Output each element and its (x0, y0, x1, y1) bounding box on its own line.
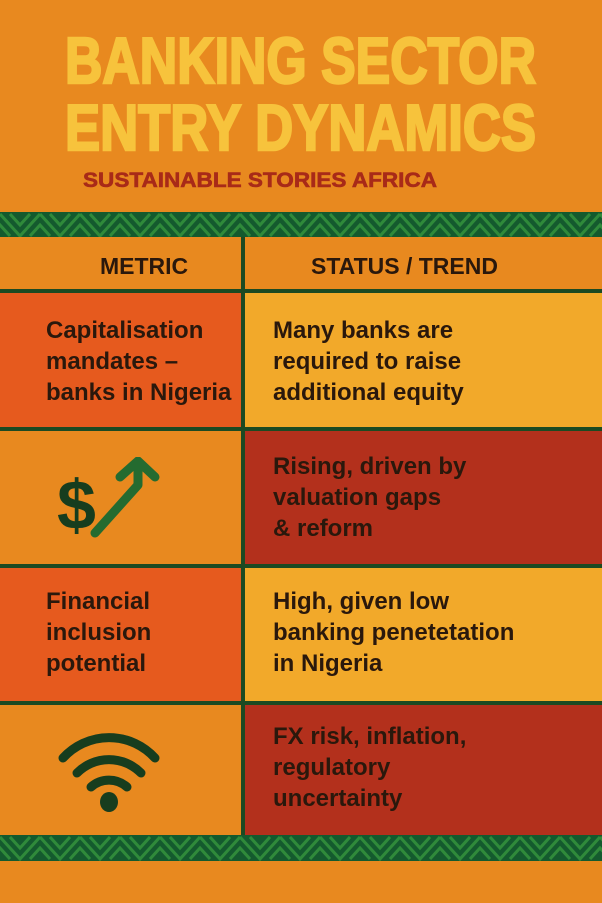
row1 metric text (46, 317, 232, 406)
row1 status text: required to raise (273, 348, 461, 375)
row4 status text (273, 723, 466, 812)
row2 status text: valuation gaps (273, 484, 441, 511)
row1 metric text: banks in Nigeria (46, 379, 231, 406)
row1 metric text: Capitalisation (46, 317, 203, 344)
header: status: STATUS / TREND (311, 253, 498, 279)
row4 status text: regulatory (273, 754, 390, 781)
row1 metric text: mandates – (46, 348, 178, 375)
pattern band top (0, 212, 602, 237)
title (65, 24, 537, 164)
row1 status text: additional equity (273, 379, 464, 406)
row4 status text: FX risk, inflation, (273, 723, 466, 750)
row2 status text: & reform (273, 515, 373, 542)
table (0, 237, 602, 836)
row 3 (0, 568, 241, 701)
row3 status text (273, 588, 514, 677)
icon: wifi signal (58, 733, 160, 812)
pattern band bottom (0, 835, 602, 861)
icon: dollar with arrow (57, 457, 160, 544)
row1 status text (273, 317, 464, 406)
row3 status text: banking penetetation (273, 619, 514, 646)
header: metric: METRIC (100, 253, 188, 279)
row2 status text (273, 453, 466, 542)
row3 metric text (46, 588, 151, 677)
header row (0, 237, 241, 289)
subtitle: SUSTAINABLE STORIES AFRICA (83, 169, 437, 192)
row3 status text: High, given low (273, 588, 449, 615)
row 2 (0, 431, 241, 564)
row3 metric text: Financial (46, 588, 150, 615)
row4 status text: uncertainty (273, 785, 402, 812)
row 1 (0, 293, 241, 427)
row 4 (0, 705, 241, 836)
row3 status text: in Nigeria (273, 650, 382, 677)
row2 status text: Rising, driven by (273, 453, 466, 480)
icon: dollar with arrow: $ (57, 466, 96, 544)
row3 metric text: inclusion (46, 619, 151, 646)
row1 status text: Many banks are (273, 317, 453, 344)
row3 metric text: potential (46, 650, 146, 677)
